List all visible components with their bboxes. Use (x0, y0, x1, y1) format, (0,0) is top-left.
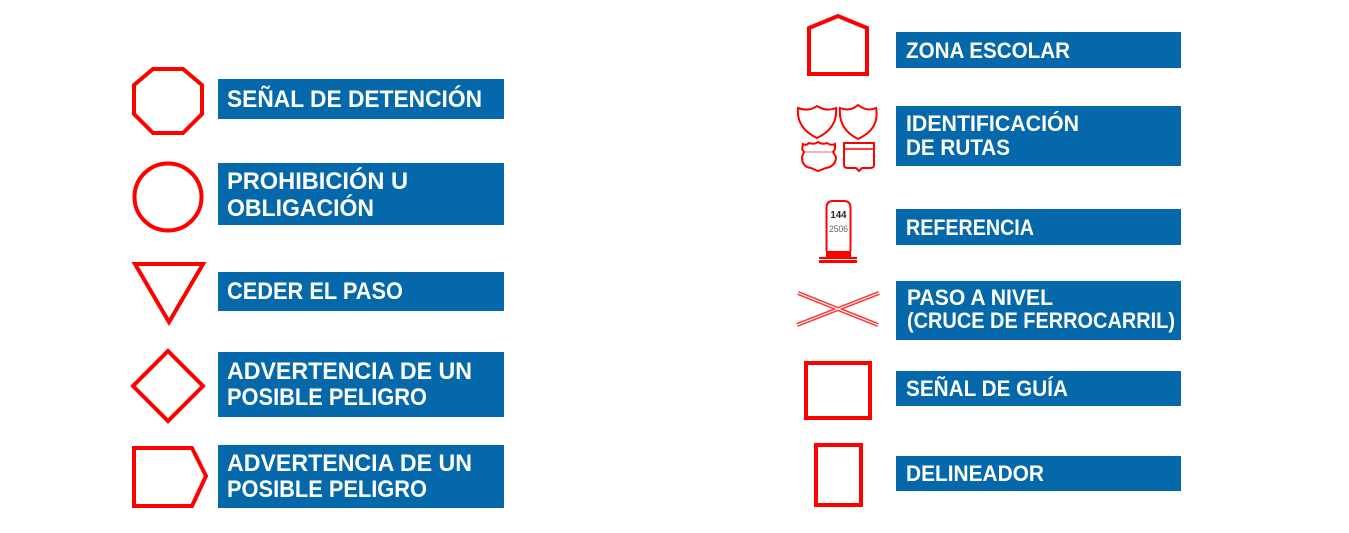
label: ceder el paso (218, 272, 504, 311)
label: delineador (896, 456, 1181, 491)
label: señal de guía (896, 371, 1181, 406)
label: zona escolar (896, 32, 1181, 68)
label: paso a nivel: PASO A NIVEL (907, 285, 1053, 310)
label: señal de guía: SEÑAL DE GUÍA (906, 376, 1068, 401)
icon: school zone pentagon (809, 16, 867, 74)
icon: pentagon pointing right (134, 448, 206, 506)
label: señal de detención (218, 79, 504, 119)
label: zona escolar: ZONA ESCOLAR (906, 38, 1070, 63)
label: ceder el paso: CEDER EL PASO (227, 278, 403, 305)
label: advertencia de un posible peligro: ADVERTENCIA DE UN (227, 358, 472, 385)
label: advertencia de un posible peligro, second (218, 445, 504, 508)
icon: railway crossing (797, 293, 879, 325)
icon: guide sign square (806, 363, 870, 418)
label: referencia (896, 209, 1181, 245)
panel: left column (133, 69, 504, 508)
label: advertencia de un posible peligro (218, 352, 504, 417)
icon: circle prohibition (134, 164, 202, 230)
label: advertencia de un posible peligro: POSIBLE PELIGRO (227, 384, 427, 411)
icon: reference milestone: 144 (830, 210, 847, 221)
label: referencia: REFERENCIA (906, 215, 1034, 240)
icon: reference milestone (819, 201, 857, 263)
icon: delineator rectangle (816, 445, 861, 505)
label: identificación de rutas: IDENTIFICACIÓN (906, 111, 1079, 136)
label: identificación de rutas: DE RUTAS (906, 135, 1010, 160)
label: prohibición u obligación: OBLIGACIÓN (227, 194, 374, 222)
panel: right column (797, 16, 1181, 505)
label: advertencia de un posible peligro, second: POSIBLE PELIGRO (227, 476, 427, 503)
icon: reference milestone: 2506 (829, 224, 848, 234)
icon: diamond warning (133, 351, 203, 421)
label: identificación de rutas (896, 106, 1181, 166)
label: prohibición u obligación: PROHIBICIÓN U (227, 167, 408, 195)
label: señal de detención: SEÑAL DE DETENCIÓN (227, 85, 482, 113)
label: paso a nivel: (CRUCE DE FERROCARRIL) (907, 308, 1175, 333)
label: advertencia de un posible peligro, second: ADVERTENCIA DE UN (227, 450, 472, 477)
label: prohibición u obligación (218, 163, 504, 225)
icon: inverted triangle yield (135, 264, 203, 322)
icon: route shields (798, 105, 877, 171)
label: delineador: DELINEADOR (906, 461, 1044, 486)
label: paso a nivel (896, 281, 1181, 340)
icon: octagon stop sign (134, 69, 202, 133)
